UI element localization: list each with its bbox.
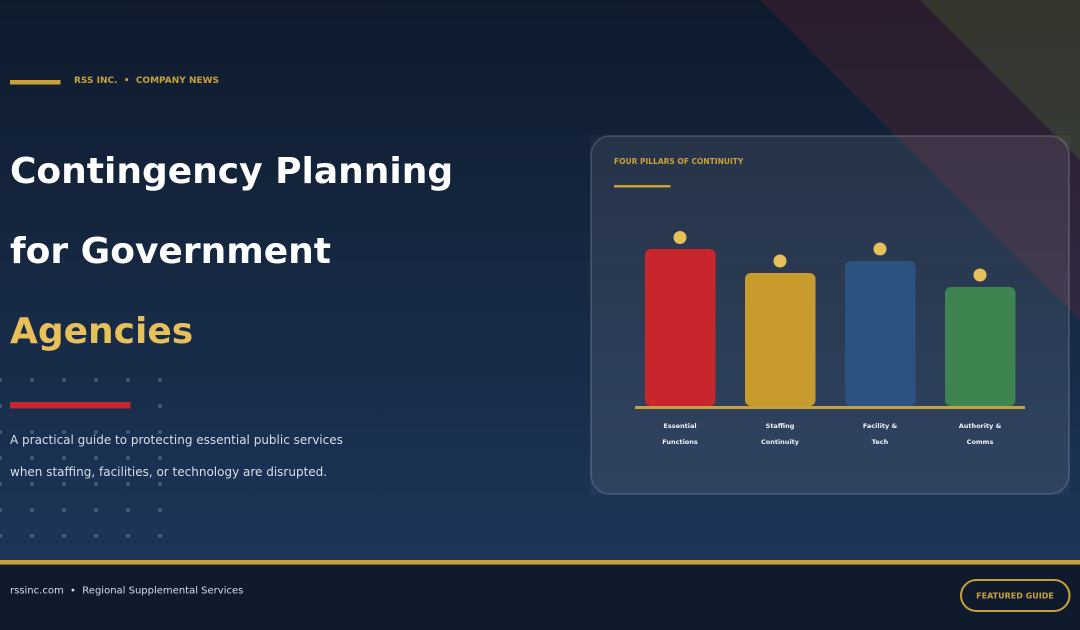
footer gold rule <box>0 560 1080 564</box>
title: Contingency Planning <box>10 151 453 192</box>
bar labels: Comms <box>967 438 993 446</box>
title: for Government <box>10 231 331 272</box>
footer bar <box>0 565 1080 630</box>
bar labels: Continuity <box>761 438 800 446</box>
title: Agencies <box>10 311 193 352</box>
subtitle: when staffing, facilities, or technology are disrupted. <box>10 465 327 479</box>
bar labels: Authority & <box>959 422 1002 430</box>
panel: four pillars of continuity <box>590 135 1070 495</box>
eyebrow rule <box>10 80 60 84</box>
bar labels: Tech <box>872 438 889 446</box>
eyebrow text: RSS INC. • COMPANY NEWS <box>74 76 219 86</box>
bar labels <box>662 422 1002 446</box>
bar: staffing continuity <box>745 254 816 406</box>
chart baseline <box>635 406 1025 409</box>
featured guide badge <box>961 580 1070 611</box>
bar: essential functions <box>645 231 716 406</box>
dot pattern <box>0 378 162 538</box>
panel heading: FOUR PILLARS OF CONTINUITY <box>614 157 744 166</box>
bar: authority and comms <box>945 268 1016 406</box>
red accent rule <box>10 402 130 408</box>
panel heading rule <box>614 185 670 188</box>
bar labels: Facility & <box>863 422 897 430</box>
footer text: rssinc.com • Regional Supplemental Services <box>10 586 243 596</box>
bar labels: Staffing <box>766 422 795 430</box>
gold diagonal band <box>920 0 1080 160</box>
bar labels: Functions <box>662 438 698 446</box>
bar: facility and tech <box>845 242 916 406</box>
subtitle: A practical guide to protecting essential public services <box>10 433 343 447</box>
bar labels: Essential <box>663 422 697 430</box>
featured guide badge: FEATURED GUIDE <box>976 592 1054 600</box>
subtitle <box>10 433 343 479</box>
title <box>10 151 453 352</box>
red diagonal band <box>760 0 1080 320</box>
